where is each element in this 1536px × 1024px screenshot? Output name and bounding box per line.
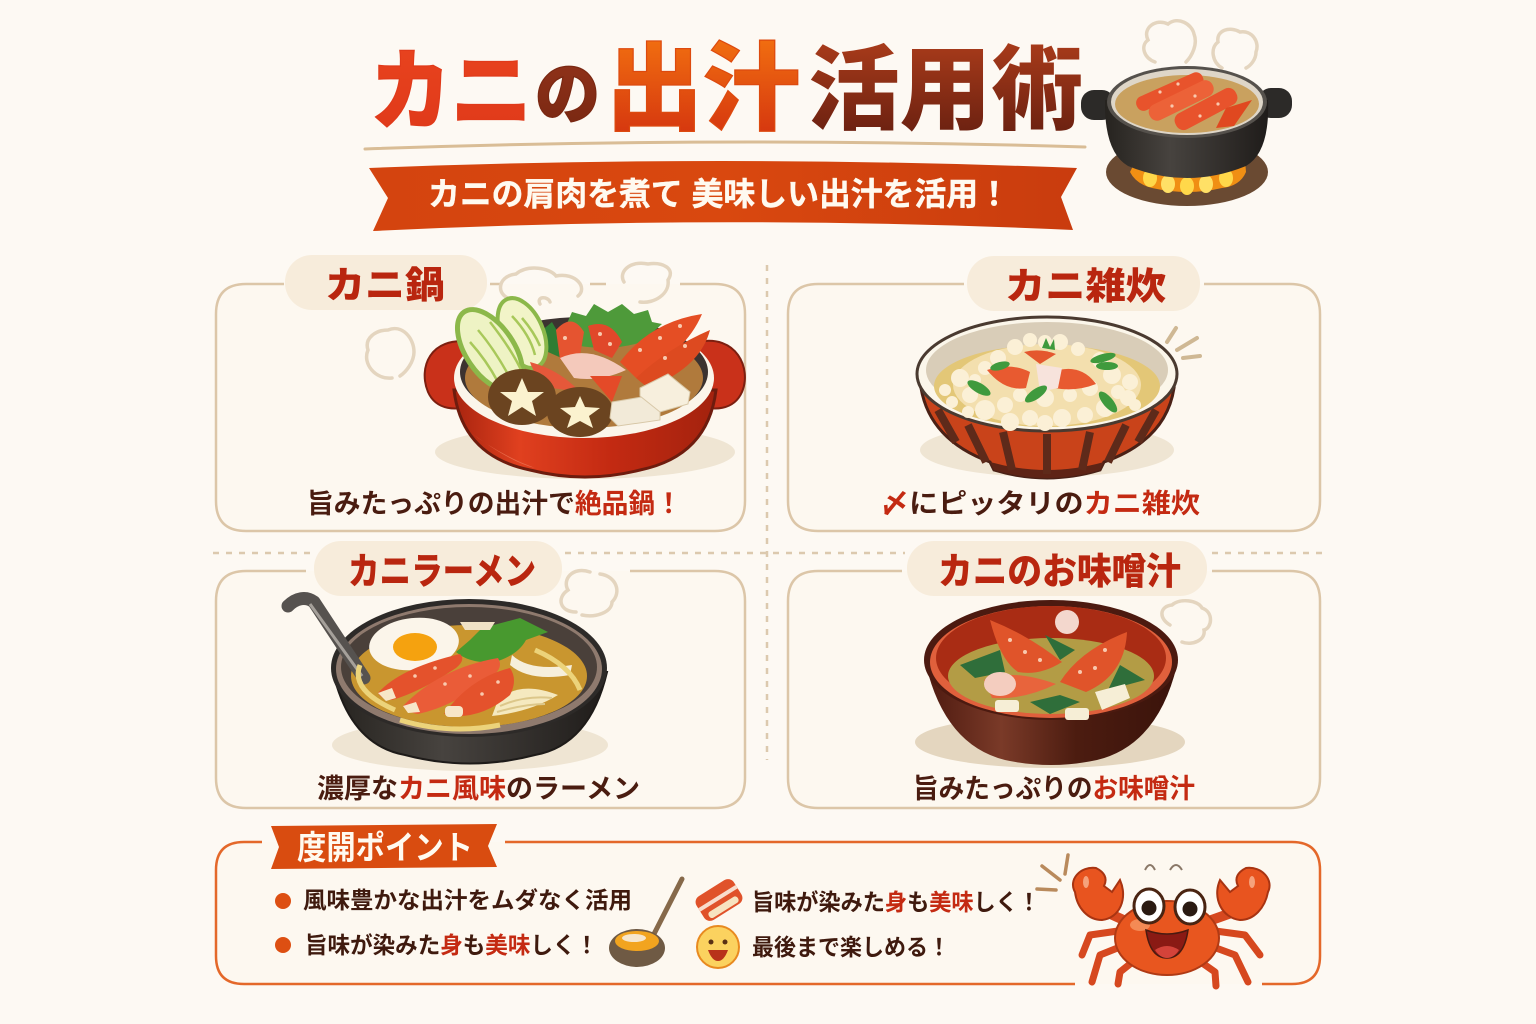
green leaves (965, 338, 1120, 415)
title: 出汁 (606, 36, 800, 143)
claws (1073, 868, 1123, 920)
greens (456, 618, 548, 662)
caption: 濃厚なカニ風味のラーメン (317, 774, 640, 804)
body (1115, 901, 1219, 975)
crab legs (378, 654, 514, 717)
title: 活用術 (808, 40, 1083, 142)
point 3: 旨味が染みた身も美味しく！ (752, 889, 1040, 915)
heading pill: カニ鍋 (325, 265, 445, 306)
title underline (365, 142, 1085, 149)
steam (561, 571, 617, 616)
icon: crab mascot (1037, 855, 1270, 986)
steam (1144, 21, 1257, 68)
illustration: miso bowl (915, 600, 1185, 768)
heading pill: カニのお味噌汁 (938, 551, 1181, 592)
icon: steaming black pot on burner (1081, 21, 1292, 206)
point 4: 最後まで楽しめる！ (752, 934, 950, 960)
heading pill (314, 541, 562, 596)
steam (367, 263, 670, 378)
eyes (1134, 889, 1164, 923)
heading ribbon: 度開ポイント (297, 829, 473, 866)
heading pill (907, 541, 1207, 596)
heading pill: カニ雑炊 (1005, 266, 1166, 307)
herbs (960, 635, 1145, 714)
heading pill (967, 256, 1200, 311)
title: の (535, 57, 600, 133)
crab claws (984, 620, 1127, 698)
panel: カニのお味噌汁 (788, 541, 1320, 808)
tofu (610, 374, 690, 426)
title (370, 36, 1083, 143)
crab topping (987, 366, 1030, 389)
panel: ポイント (216, 824, 1320, 986)
greens (565, 304, 662, 348)
noodles and onion (358, 650, 580, 729)
subtitle banner: カニの肩肉を煮て 美味しい出汁を活用！ (428, 176, 1010, 212)
panel: カニラーメン (216, 541, 745, 808)
egg (367, 613, 461, 675)
panel: カニ鍋 (216, 255, 745, 531)
cabbage (444, 291, 556, 402)
caption: 〆にピッタリの カニ雑炊 (880, 489, 1200, 519)
handles (1081, 90, 1115, 120)
illustration: ramen bowl (288, 599, 608, 771)
ladle (288, 599, 364, 678)
crab legs (1134, 70, 1252, 133)
rice (939, 333, 1141, 431)
motion marks (1037, 855, 1068, 890)
trivet (1106, 138, 1268, 206)
rim (1107, 66, 1267, 138)
icon: ladle (609, 879, 682, 967)
caption: 旨みたっぷりの出汁で絶品鍋！ (307, 489, 682, 519)
point 2: 旨味が染みた身も美味しく！ (305, 932, 598, 958)
point 1: 風味豊かな出汁をムダなく活用 (303, 887, 632, 913)
subtitle banner (369, 161, 1077, 231)
icon: smiley (697, 926, 739, 968)
illustration: zosui bowl (917, 317, 1177, 478)
tofu (995, 684, 1130, 720)
heading pill (285, 255, 487, 310)
sparkle lines (1167, 328, 1200, 358)
title: カニ (370, 42, 532, 141)
caption: 旨みたっぷりのお味噌汁 (913, 774, 1195, 804)
panel: カニ雑炊 (788, 256, 1320, 531)
legs (1082, 912, 1260, 986)
steam (1162, 601, 1210, 643)
mouth (1146, 930, 1188, 958)
mushrooms (488, 369, 613, 437)
heading pill: カニラーメン (348, 551, 536, 592)
dashed dividers (213, 265, 1322, 760)
flames (1130, 160, 1246, 195)
icon: crab leg (693, 876, 745, 924)
illustration: red nabe (425, 291, 745, 479)
crab pieces (530, 314, 710, 402)
pot body (1105, 100, 1268, 178)
